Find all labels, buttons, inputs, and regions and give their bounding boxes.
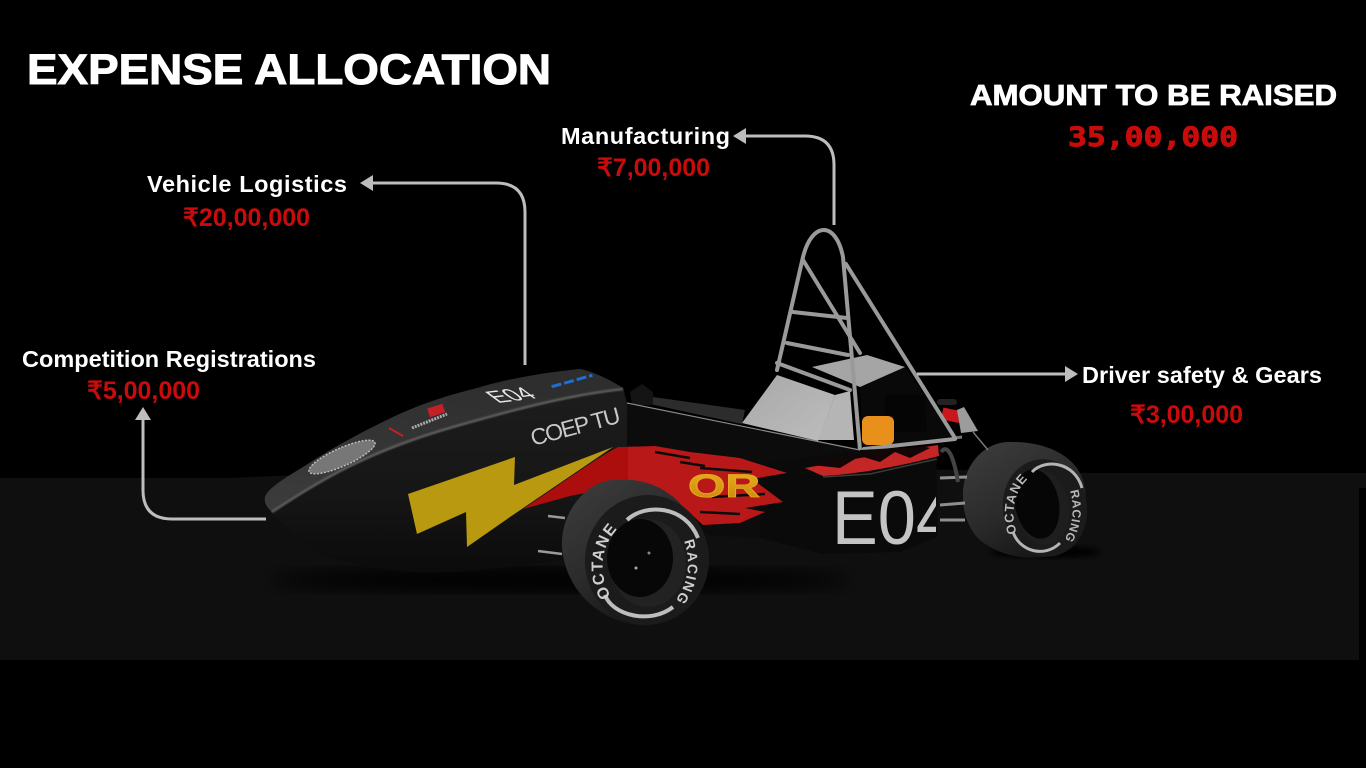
race car (264, 190, 1087, 625)
rear bodywork (760, 445, 939, 554)
front wheel: RACING (677, 539, 698, 604)
callout: driver safety and gears: ₹3,00,000 (1130, 401, 1243, 429)
title: EXPENSE ALLOCATION (27, 46, 551, 94)
nose number: E04 (479, 384, 544, 407)
front wheel: OCTANE (592, 522, 617, 599)
COEP TU text: COEP TU (528, 402, 623, 451)
amount to be raised: AMOUNT TO BE RAISED (970, 80, 1337, 112)
callout: competition registrations: Competition Registrations (22, 346, 316, 372)
roll hoop tubes (777, 230, 955, 450)
body side (627, 403, 938, 554)
callout: manufacturing: ₹7,00,000 (597, 154, 710, 182)
callout: vehicle logistics (147, 171, 347, 232)
callout: vehicle logistics: Vehicle Logistics (147, 171, 347, 197)
callout: manufacturing (561, 123, 730, 182)
rim highlight (627, 403, 860, 450)
rear wheel (963, 442, 1087, 558)
nose cone (265, 364, 628, 572)
front wheel (562, 480, 709, 625)
ground floor (0, 468, 1366, 660)
OR logo: OR (688, 468, 760, 504)
rear number E04: E04 (832, 476, 954, 561)
arrow: competition registrations (135, 407, 266, 519)
callout: vehicle logistics: ₹20,00,000 (183, 204, 310, 232)
callout: competition registrations (22, 346, 316, 405)
callout: driver safety and gears (1082, 362, 1322, 429)
nose logos (305, 364, 592, 480)
rear frame and shock (937, 399, 988, 520)
callout: driver safety and gears: Driver safety & Gears (1082, 362, 1322, 388)
arrow: driver safety (917, 366, 1078, 382)
callout: manufacturing: Manufacturing (561, 123, 730, 149)
lightning bolt (408, 447, 613, 547)
arrow: vehicle logistics (360, 175, 525, 365)
front suspension mounts (538, 516, 565, 554)
callout: competition registrations: ₹5,00,000 (87, 377, 200, 405)
red wedge (523, 447, 628, 509)
flames on side (620, 446, 787, 525)
rear wheel: OCTANE (1004, 474, 1028, 534)
arrow: manufacturing (733, 128, 834, 225)
amount to be raised: 35,00,000 (1068, 122, 1238, 153)
cockpit box and seat (630, 355, 956, 447)
amount to be raised (970, 80, 1337, 153)
rear wheel: RACING (1066, 490, 1081, 542)
